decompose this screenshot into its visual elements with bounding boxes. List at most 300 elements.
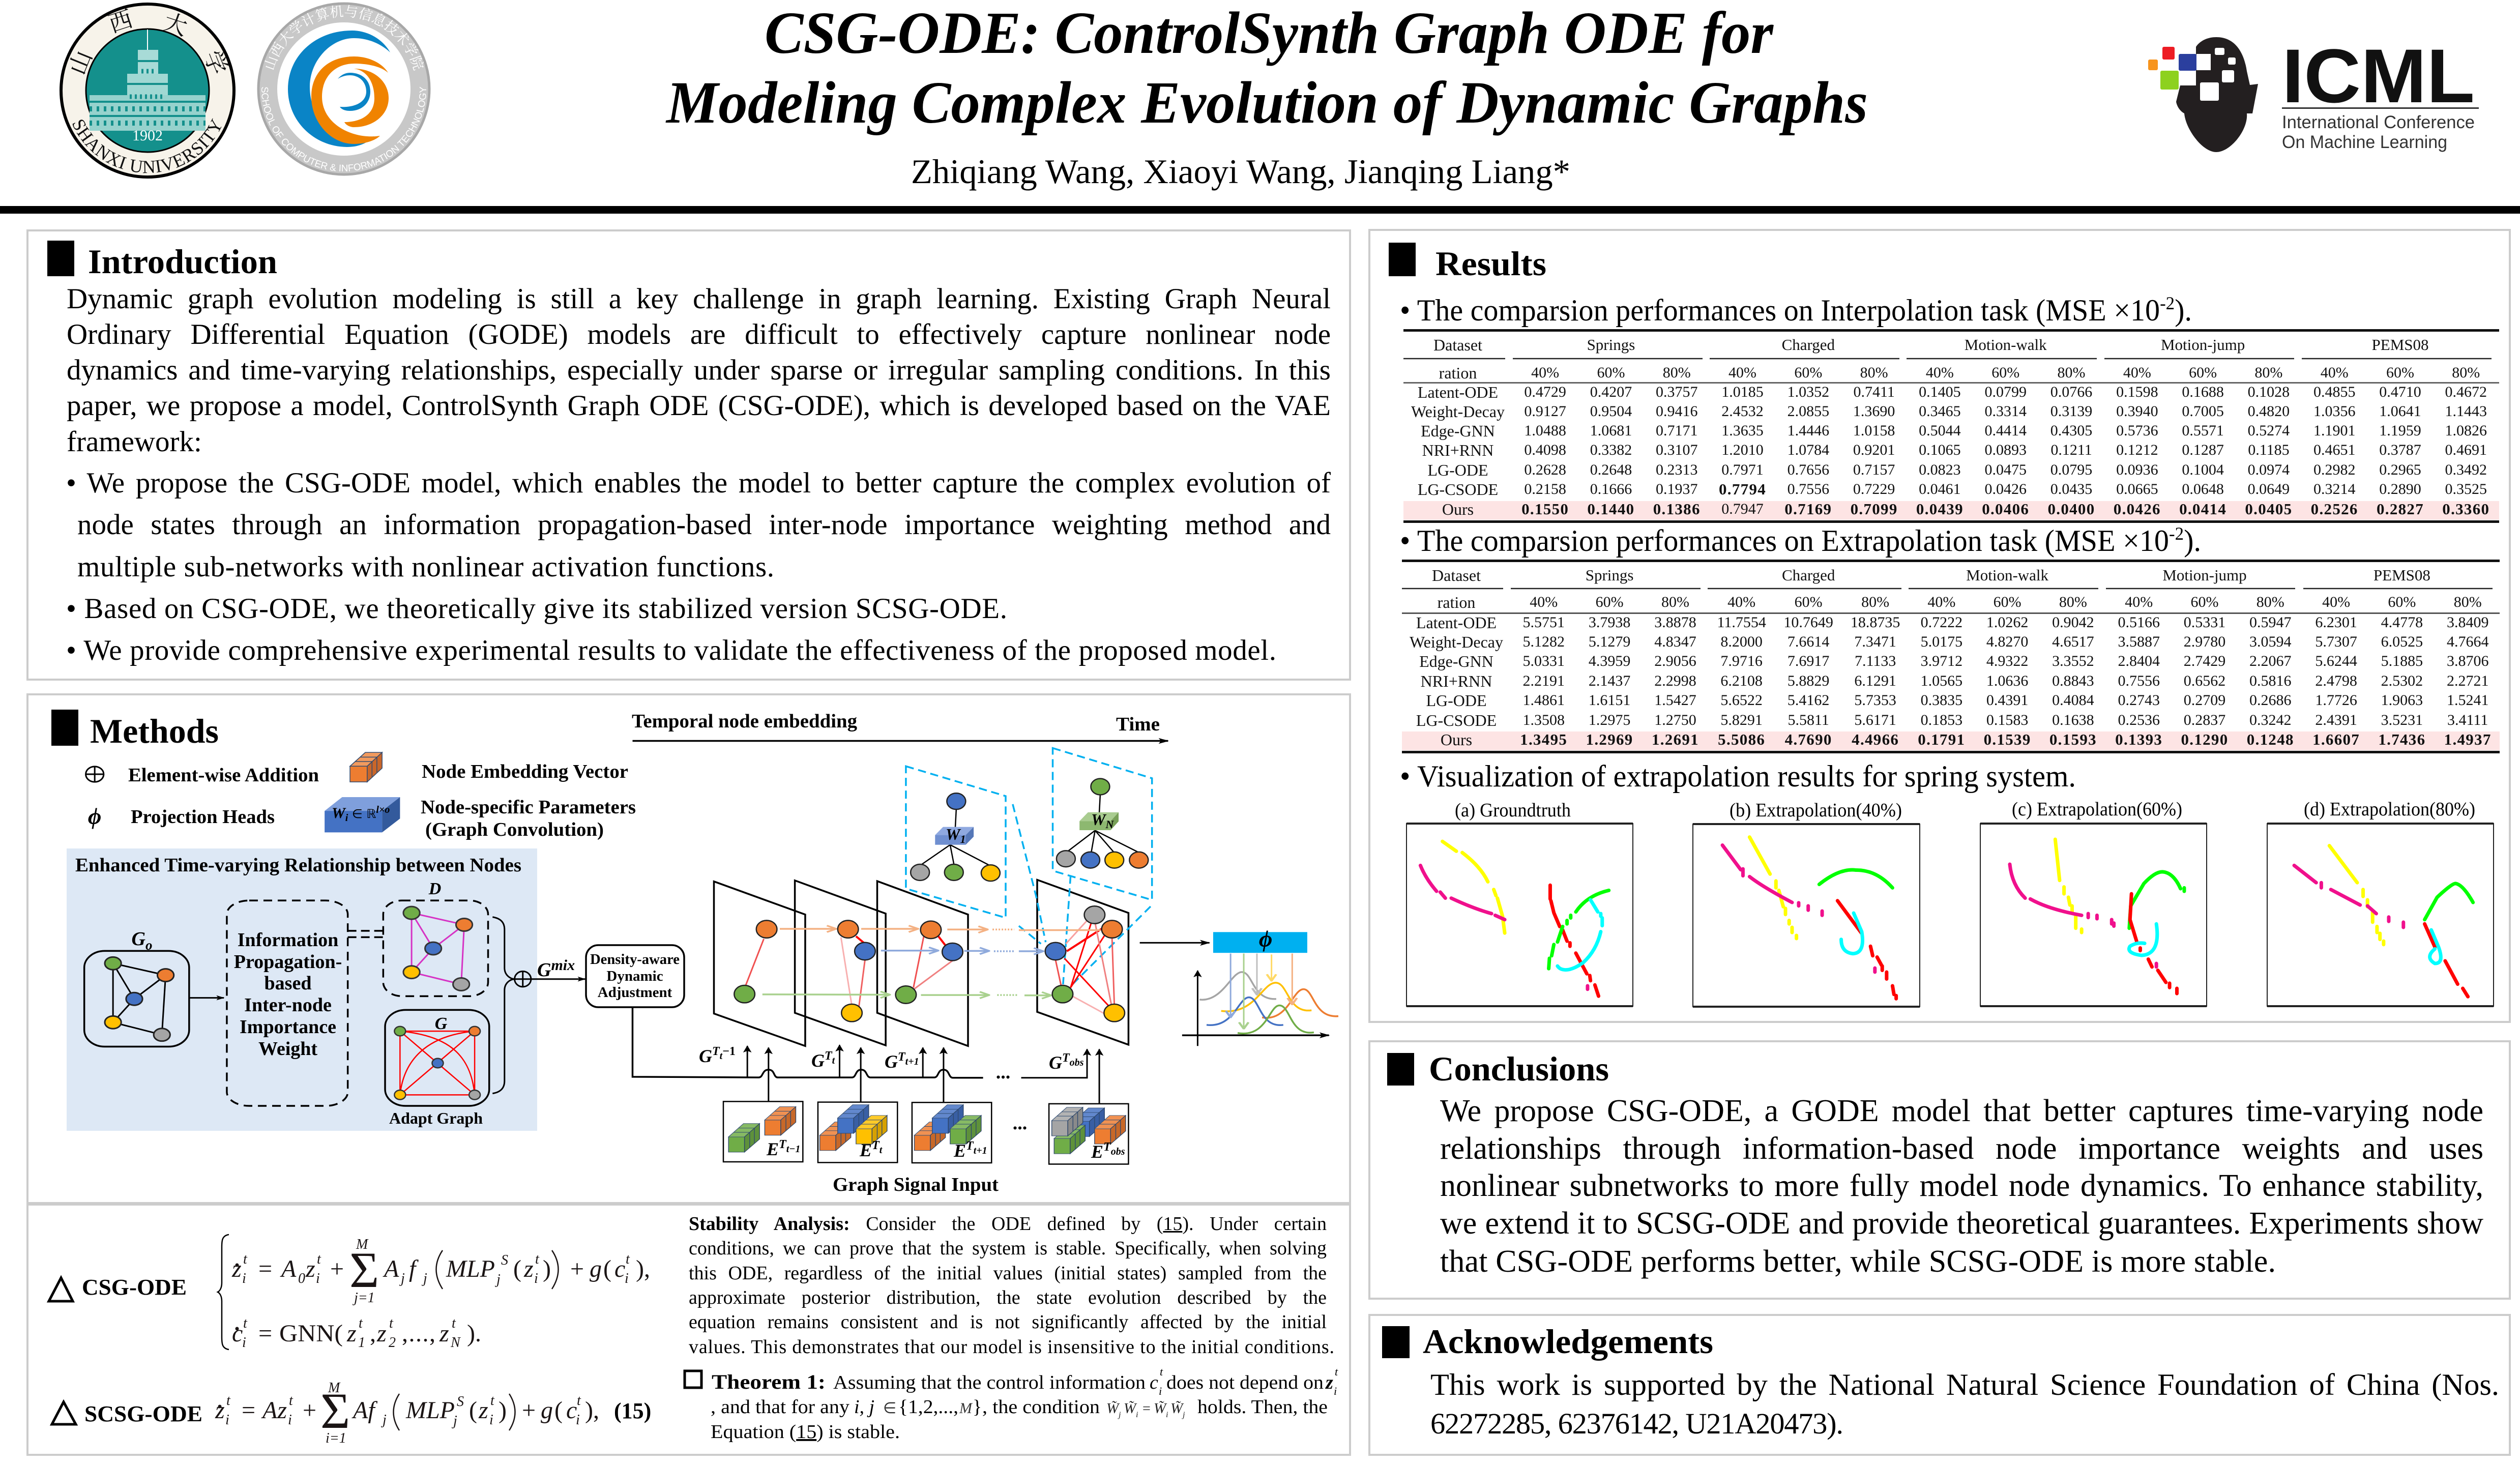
table: extrapolation results: 8.2000 (1720, 633, 1763, 650)
table: extrapolation results: 60% (2388, 594, 2416, 610)
diagram: graph construction: Weight (258, 1038, 317, 1060)
equation: CSG-ODE: j (399, 1271, 405, 1286)
label: G mix: G (537, 959, 551, 981)
chart: extrapolation 80% trajectories (2267, 824, 2494, 1006)
authors: Zhiqiang Wang, Xiaoyi Wang, Jianqing Liang* (911, 152, 1570, 191)
legend: i (345, 812, 348, 824)
legend: l×o (376, 804, 390, 815)
equation: CSG-ODE: z (346, 1320, 357, 1347)
equation: SCSG-ODE: ( (469, 1397, 477, 1424)
logo: ICML: ICML (2282, 33, 2475, 119)
diagram: graph signal inputs: ... (1013, 1112, 1027, 1134)
table: extrapolation results: 1.2975 (1589, 712, 1630, 728)
table: extrapolation results: 1.3495 (1520, 730, 1567, 748)
table: extrapolation results: 3.3552 (2052, 653, 2094, 669)
table: interpolation results: 0.2890 (2379, 481, 2421, 497)
diagram: graph signal inputs (632, 1007, 1128, 1195)
table: extrapolation results: 1.2750 (1654, 712, 1696, 728)
table: extrapolation results: Springs (1586, 566, 1633, 584)
text block: conclusions (1440, 1091, 2483, 1279)
table: interpolation results: Motion-jump (2161, 336, 2245, 354)
legend: ∈ ℝ (348, 807, 376, 821)
text block: stability analysis: conditions, we can prove that the system is stable. Specifically, when solving (689, 1238, 1327, 1259)
table: interpolation results: 1.0185 (1721, 384, 1764, 400)
text block: theorem 1: i (1166, 1411, 1168, 1419)
legend: Projection Heads (131, 806, 275, 828)
table: interpolation results: 0.4207 (1590, 384, 1632, 400)
equation: SCSG-ODE: Σ (320, 1383, 350, 1439)
diagram: graph signal inputs: T (872, 1139, 880, 1152)
diagram: graph construction: based (265, 973, 311, 994)
equation: CSG-ODE: + (570, 1255, 584, 1282)
subheading: interpolation: • The comparsion performances on Interpolation task (MSE ×10 (1400, 294, 2185, 327)
subheading: interpolation: -2 (2160, 293, 2175, 313)
table: extrapolation results: 5.8291 (1720, 712, 1763, 728)
table: interpolation results: 1.1443 (2445, 403, 2487, 420)
diagram: temporal graph planes: W (1091, 810, 1105, 829)
table: interpolation results: 0.9416 (1656, 403, 1697, 420)
table: interpolation results: Latent-ODE (1418, 383, 1498, 401)
equation: SCSG-ODE: S (457, 1394, 464, 1410)
seal text: university name: 西 (105, 6, 136, 38)
table: extrapolation results: 2.5302 (2381, 672, 2423, 689)
box: density-aware dynamic adjustment: Dynamic (606, 968, 663, 984)
text block: stability analysis (689, 1211, 1334, 1358)
diagram: graph signal inputs: ... (996, 1062, 1010, 1083)
table: extrapolation results: 60% (1795, 594, 1823, 610)
equation: SCSG-ODE: t (226, 1393, 231, 1409)
equation: CSG-ODE: i (316, 1271, 320, 1286)
table: interpolation results: 2.0855 (1788, 403, 1829, 420)
diagram: graph signal inputs: T (898, 1050, 906, 1064)
equation: SCSG-ODE: ), (585, 1397, 599, 1424)
text block: conclusions: we extend it to SCSG-ODE and provide theoretical guarantees. Experiments show (1440, 1206, 2483, 1241)
legend (86, 752, 636, 840)
text block: theorem 1: Equation (15) is stable. (711, 1421, 900, 1443)
equation: CSG-ODE: Σ (349, 1242, 379, 1298)
equation: SCSG-ODE (52, 1380, 651, 1446)
table: extrapolation results: 0.1853 (1921, 712, 1962, 728)
equation: CSG-ODE: t (452, 1315, 456, 1331)
chart: groundtruth trajectories (1406, 824, 1633, 1006)
diagram: graph signal inputs: Graph Signal Input (833, 1174, 999, 1195)
table: extrapolation results: 3.8706 (2447, 653, 2488, 669)
table: extrapolation results: 0.1539 (1984, 730, 2031, 748)
text block: theorem 1: Theorem 1: (712, 1370, 826, 1393)
panel: enhanced time-varying relationship (67, 848, 585, 1131)
table: interpolation results: 0.7171 (1656, 422, 1697, 439)
table: interpolation results: 0.4651 (2313, 442, 2355, 458)
table: extrapolation results: 2.2191 (1522, 672, 1565, 689)
chart: trajectory panel captions (1455, 799, 2475, 821)
equation: CSG-ODE: f (409, 1255, 419, 1282)
table: interpolation results: Springs (1587, 336, 1635, 354)
table: interpolation results: 0.9127 (1524, 403, 1566, 420)
table: interpolation results: 0.7794 (1719, 480, 1766, 498)
table: extrapolation results: 2.2067 (2249, 653, 2292, 669)
table: extrapolation results: 1.6151 (1589, 692, 1630, 709)
table: interpolation results: 0.4672 (2445, 384, 2487, 400)
logo: ICML (2148, 33, 2479, 152)
table: extrapolation results: Edge-GNN (1419, 652, 1493, 670)
table: interpolation results: 0.1666 (1590, 481, 1632, 497)
table: interpolation results: LG-CSODE (1418, 480, 1498, 499)
table: interpolation results: 0.1598 (2116, 384, 2158, 400)
table: interpolation results: 60% (1794, 364, 1822, 381)
diagram: graph construction (84, 880, 585, 1127)
equation: CSG-ODE: t (359, 1315, 363, 1331)
table: extrapolation results: 1.2691 (1652, 730, 1699, 748)
equation: CSG-ODE: j=1 (353, 1290, 375, 1306)
text block: theorem 1: , the condition (982, 1396, 1100, 1418)
diagram: graph signal inputs: T (1103, 1140, 1111, 1154)
table: extrapolation results: 0.1393 (2115, 730, 2162, 748)
table: interpolation results: 0.2158 (1524, 481, 1566, 497)
table: interpolation results: PEMS08 (2372, 336, 2428, 354)
equation: CSG-ODE: j (495, 1272, 501, 1287)
diagram: graph signal inputs: G (699, 1046, 712, 1066)
equation: SCSG-ODE: i (288, 1412, 292, 1428)
table: extrapolation results: 40% (1927, 594, 1955, 610)
table: extrapolation results: Motion-walk (1966, 566, 2048, 584)
equation: CSG-ODE: t (243, 1251, 248, 1267)
table: interpolation results: 0.1386 (1653, 500, 1701, 518)
table: extrapolation results: 0.7222 (1921, 614, 1962, 631)
table: interpolation results: 0.7556 (1788, 481, 1829, 497)
table: extrapolation results: 5.8829 (1788, 672, 1829, 689)
equation: CSG-ODE: t (243, 1315, 248, 1331)
table: interpolation results: 0.3757 (1656, 384, 1697, 400)
logo: School of Computer and Information Technology: SCHOOL OF COMPUTER & INFORMATION TECHNOLOGY (261, 86, 426, 171)
seal text: university name: 大 (160, 9, 191, 41)
table: extrapolation results: 0.1248 (2247, 730, 2294, 748)
diagram: graph signal inputs: E (1091, 1141, 1103, 1162)
table: interpolation results: 0.1028 (2248, 384, 2290, 400)
table: extrapolation results: 2.1437 (1589, 672, 1630, 689)
table: interpolation results: 80% (1663, 364, 1691, 381)
text block: theorem 1: = (1142, 1401, 1151, 1417)
table: interpolation results: 40% (2321, 364, 2349, 381)
equation: SCSG-ODE: t (289, 1393, 294, 1409)
text block: contributions list: multiple sub-networks with nonlinear activation functions. (77, 551, 774, 583)
table: interpolation results: Edge-GNN (1421, 422, 1495, 440)
text block: theorem 1: W̃ (1170, 1400, 1184, 1417)
panel: introduction (27, 230, 1350, 680)
table: interpolation results: 0.1065 (1919, 442, 1961, 458)
subheading: visualization: • Visualization of extrapolation results for spring system. (1400, 759, 2076, 793)
text block: introduction paragraph: framework: (67, 426, 202, 458)
table: interpolation results: 0.0400 (2047, 500, 2095, 518)
table: extrapolation results: 6.2301 (2315, 614, 2357, 631)
text block: theorem 1: j (1182, 1411, 1185, 1419)
table: interpolation results: 0.0406 (1982, 500, 2029, 518)
table: interpolation results: 0.0426 (2114, 500, 2161, 518)
table: interpolation results: 0.0414 (2179, 500, 2226, 518)
table: extrapolation results: 1.7436 (2378, 730, 2425, 748)
logo: ICML: On Machine Learning (2282, 132, 2447, 152)
table: interpolation results: 0.2313 (1656, 461, 1697, 478)
equation: SCSG-ODE: (15) (614, 1398, 651, 1423)
equation: CSG-ODE: z (523, 1255, 534, 1282)
table: interpolation results: 0.0405 (2245, 500, 2292, 518)
table: extrapolation results: 18.8735 (1851, 614, 1900, 631)
diagram: graph construction: Inter-node (244, 994, 332, 1016)
table: interpolation results: 0.1211 (2050, 442, 2092, 458)
equation: SCSG-ODE: ) (499, 1397, 507, 1424)
table: extrapolation results: 40% (2322, 594, 2350, 610)
table: extrapolation results: 7.1133 (1855, 653, 1896, 669)
legend: (Graph Convolution) (425, 819, 604, 840)
table: interpolation results: 80% (2058, 364, 2086, 381)
table: extrapolation results: 0.3835 (1921, 692, 1962, 709)
table: interpolation results: 0.7229 (1853, 481, 1895, 497)
table: interpolation results: 60% (1991, 364, 2019, 381)
table: interpolation results: 0.1004 (2182, 461, 2224, 478)
table: interpolation results: Dataset (1433, 336, 1482, 354)
table: interpolation results: 60% (1597, 364, 1625, 381)
panel: methods (27, 694, 1350, 1455)
heading: Methods: Methods (90, 712, 219, 750)
table: extrapolation results: 0.5947 (2249, 614, 2292, 631)
seal text: university name: 山 (64, 47, 97, 78)
text block: introduction paragraph: Ordinary Differential Equation (GODE) models are difficult to effectively capture nonlinear node (67, 318, 1331, 350)
equation: SCSG-ODE: j (452, 1413, 457, 1429)
table: interpolation results: 0.3139 (2050, 403, 2092, 420)
equation: SCSG-ODE: j (381, 1412, 387, 1428)
diagram: graph signal inputs: t (832, 1055, 836, 1066)
table: extrapolation results: 0.2709 (2184, 692, 2225, 709)
table: extrapolation results: 6.1291 (1854, 672, 1896, 689)
table: extrapolation results: 0.2743 (2118, 692, 2160, 709)
table: extrapolation results: 4.3959 (1589, 653, 1630, 669)
label: G mix: mix (551, 957, 575, 974)
table: extrapolation results: 80% (1861, 594, 1889, 610)
table: extrapolation results: 4.6517 (2052, 633, 2094, 650)
equation: SCSG-ODE: M (328, 1380, 341, 1396)
table: interpolation results: 0.1212 (2116, 442, 2158, 458)
table: extrapolation results: 0.2536 (2118, 712, 2160, 728)
table: extrapolation results: ration (1438, 593, 1475, 611)
table: interpolation results: 0.4414 (1984, 422, 2027, 439)
heading: Acknowledgements: Acknowledgements (1423, 1322, 1713, 1361)
table: interpolation results: LG-ODE (1427, 461, 1488, 479)
table: extrapolation results: 2.4798 (2315, 672, 2357, 689)
table: interpolation results: 0.5736 (2116, 422, 2158, 439)
table: interpolation results: 0.1937 (1656, 481, 1697, 497)
equation: CSG-ODE: ( (513, 1255, 521, 1282)
diagram: graph construction: Adapt Graph (389, 1109, 483, 1127)
table: extrapolation results: Latent-ODE (1416, 613, 1497, 632)
equation: CSG-ODE: S (501, 1252, 508, 1268)
logo: School of Computer and Information Technology: 山西大学计算机与信息技术学院 (265, 5, 424, 71)
text block: acknowledgements: This work is supported by the National Natural Science Foundation of China (Nos. (1430, 1368, 2499, 1402)
table: extrapolation results: 1.0636 (1986, 672, 2028, 689)
table: interpolation results: 0.3940 (2116, 403, 2158, 420)
table: interpolation results: 40% (1926, 364, 1954, 381)
diagram: graph signal inputs: T (825, 1049, 833, 1063)
subheading: interpolation: ). (2175, 294, 2192, 327)
table: interpolation results: 60% (2189, 364, 2217, 381)
table: interpolation results: 0.0426 (1984, 481, 2027, 497)
text block: stability analysis: this ODE, regardless of the initial values (initial states) sampled from the (689, 1263, 1327, 1284)
equation: CSG-ODE: z (231, 1255, 242, 1282)
diagram: graph construction: Importance (240, 1016, 336, 1038)
diagram: graph signal inputs: t (720, 1050, 723, 1062)
equation: SCSG-ODE: t (577, 1393, 581, 1409)
chart: extrapolation 40% trajectories (1693, 824, 1920, 1007)
table: interpolation results: 0.4729 (1524, 384, 1566, 400)
table: extrapolation results: 3.8878 (1654, 614, 1696, 631)
equation: CSG-ODE: ), (636, 1255, 650, 1282)
equation: SCSG-ODE: i (225, 1412, 229, 1428)
table: interpolation results: 60% (2386, 364, 2414, 381)
table: extrapolation results: 5.4162 (1788, 692, 1829, 709)
table: extrapolation results: 0.1791 (1918, 730, 1965, 748)
text block: stability analysis: approximate posterior distribution, the state evolution described by the (689, 1287, 1327, 1308)
table: interpolation results: 0.7005 (2182, 403, 2224, 420)
table: extrapolation results: 5.6171 (1854, 712, 1896, 728)
table: interpolation results: 0.4710 (2379, 384, 2421, 400)
equation: CSG-ODE: 1 (358, 1335, 365, 1351)
table: extrapolation results: 3.5231 (2381, 712, 2423, 728)
table: extrapolation results: 2.7429 (2184, 653, 2225, 669)
table: extrapolation results: 0.2686 (2249, 692, 2292, 709)
table: extrapolation results: 5.7307 (2315, 633, 2357, 650)
table: interpolation results: 0.0648 (2182, 481, 2224, 497)
table: interpolation results: Ours (1442, 500, 1474, 518)
diagram: graph construction: G (435, 1014, 448, 1033)
table: extrapolation results: 80% (2257, 594, 2284, 610)
table: interpolation results: 40% (1728, 364, 1756, 381)
text block: theorem 1: } (973, 1396, 982, 1418)
table: extrapolation results: 3.5887 (2118, 633, 2160, 650)
table: interpolation results: 0.1185 (2248, 442, 2290, 458)
title: CSG-ODE: ControlSynth Graph ODE for (765, 0, 1774, 66)
panel: acknowledgements (1369, 1315, 2510, 1455)
equation: CSG-ODE: i (625, 1271, 629, 1286)
table: extrapolation results: 1.2969 (1586, 730, 1633, 748)
diagram: graph signal inputs: −1 (722, 1045, 736, 1058)
table: extrapolation results: 1.0262 (1986, 614, 2028, 631)
table: interpolation results: 0.1405 (1919, 384, 1961, 400)
diagram: graph signal inputs: t+1 (905, 1056, 919, 1067)
table: interpolation results: 1.1901 (2313, 422, 2355, 439)
logo: School of Computer and Information Technology (257, 2, 430, 176)
table: interpolation results: NRI+RNN (1422, 441, 1493, 459)
table: interpolation results: 0.0461 (1919, 481, 1961, 497)
seal text: university name: SHANXI UNIVERSITY (72, 118, 222, 173)
table: extrapolation results: 2.2998 (1654, 672, 1696, 689)
table: extrapolation results: 2.8404 (2118, 653, 2160, 669)
table: interpolation results: Charged (1782, 336, 1835, 354)
text block: theorem 1: M (959, 1400, 973, 1417)
equation: CSG-ODE: c (614, 1255, 625, 1282)
table: interpolation results: 0.0665 (2116, 481, 2158, 497)
table: interpolation results: 0.3360 (2442, 500, 2489, 518)
table: extrapolation results: 0.1290 (2181, 730, 2229, 748)
chart: trajectory panel captions: (b) Extrapolation(40%) (1730, 800, 1902, 821)
header band (0, 0, 2520, 214)
equation: CSG-ODE: i (534, 1271, 538, 1286)
table: extrapolation results: Charged (1782, 566, 1835, 584)
diagram: graph signal inputs: T (712, 1045, 720, 1058)
table: interpolation results: 0.5571 (2182, 422, 2224, 439)
table: extrapolation results: 0.4084 (2052, 692, 2094, 709)
equation: SCSG-ODE: i (576, 1412, 580, 1428)
table: interpolation results: 0.7099 (1851, 500, 1898, 518)
equation: CSG-ODE: j (422, 1271, 427, 1286)
equation: SCSG-ODE: c (566, 1397, 577, 1424)
table: extrapolation results: 0.2837 (2184, 712, 2225, 728)
table: extrapolation results: 0.3242 (2249, 712, 2292, 728)
text block: acknowledgements: 62272285, 62376142, U21A20473). (1430, 1407, 1843, 1440)
equation: CSG-ODE: N (450, 1335, 461, 1351)
table: extrapolation results: 4.7690 (1785, 730, 1832, 748)
table: extrapolation results: 1.7726 (2315, 692, 2357, 709)
text block: theorem 1: i (1334, 1385, 1337, 1397)
table: extrapolation results: 0.5816 (2249, 672, 2292, 689)
table: extrapolation results: 5.5086 (1718, 730, 1765, 748)
table: interpolation results: 0.7411 (1853, 384, 1895, 400)
table: extrapolation results: 3.4111 (2447, 712, 2488, 728)
table: extrapolation results: 40% (1727, 594, 1755, 610)
legend: W (332, 805, 345, 822)
table: interpolation results: 0.1550 (1521, 500, 1569, 518)
table: interpolation results: 0.7947 (1721, 501, 1764, 517)
table: extrapolation results: 3.7938 (1589, 614, 1630, 631)
table: extrapolation results: 5.7353 (1854, 692, 1896, 709)
table: extrapolation results: 0.4391 (1986, 692, 2028, 709)
diagram: graph signal inputs: G (811, 1050, 825, 1071)
table: interpolation results: 0.0435 (2050, 481, 2092, 497)
diagram: temporal graph planes (714, 748, 1152, 1046)
chart: trajectory panel captions: (a) Groundtruth (1455, 800, 1571, 821)
table: interpolation results: 0.4098 (1524, 442, 1566, 458)
equation: SCSG-ODE: ( (554, 1397, 563, 1424)
text block: theorem 1: , and that for any (711, 1396, 849, 1418)
table: extrapolation results: 5.0331 (1522, 653, 1565, 669)
equation: SCSG-ODE: Af (351, 1397, 377, 1424)
table: interpolation results: 80% (2254, 364, 2282, 381)
diagram: graph construction: Propagation- (234, 951, 342, 973)
equation: SCSG-ODE: MLP (405, 1397, 455, 1424)
table: interpolation results: 0.5274 (2248, 422, 2290, 439)
equation: SCSG-ODE: = (242, 1397, 255, 1424)
panel: conclusions (1369, 1041, 2510, 1299)
equation: CSG-ODE (49, 1235, 650, 1351)
timeline arrow: Temporal node embedding (632, 711, 857, 732)
table: interpolation results: 1.2010 (1721, 442, 1764, 458)
table: interpolation results: 1.0356 (2313, 403, 2355, 420)
text block: theorem 1: z (1325, 1372, 1333, 1393)
table: interpolation results: 0.3314 (1984, 403, 2027, 420)
equation: CSG-ODE: 2 (389, 1335, 396, 1351)
text block: introduction paragraph: Dynamic graph evolution modeling is still a key challenge in graph learning. Existing Graph Neural (67, 283, 1331, 315)
table: extrapolation results: 4.8347 (1654, 633, 1696, 650)
table: extrapolation results: 5.6244 (2315, 653, 2357, 669)
table: interpolation results: 0.7656 (1788, 461, 1829, 478)
diagram: temporal graph planes: 1 (960, 833, 965, 845)
table: interpolation results: 0.1688 (2182, 384, 2224, 400)
equations: CSG-ODE and SCSG-ODE (49, 1235, 651, 1446)
table: interpolation results: 0.3107 (1656, 442, 1697, 458)
equation: CSG-ODE: t (317, 1251, 321, 1267)
table: interpolation results: 0.0936 (2116, 461, 2158, 478)
table: extrapolation results: 3.0594 (2249, 633, 2292, 650)
table: interpolation results: 2.4532 (1721, 403, 1764, 420)
table: extrapolation results: 10.7649 (1783, 614, 1833, 631)
equation: SCSG-ODE: Az (261, 1397, 287, 1424)
